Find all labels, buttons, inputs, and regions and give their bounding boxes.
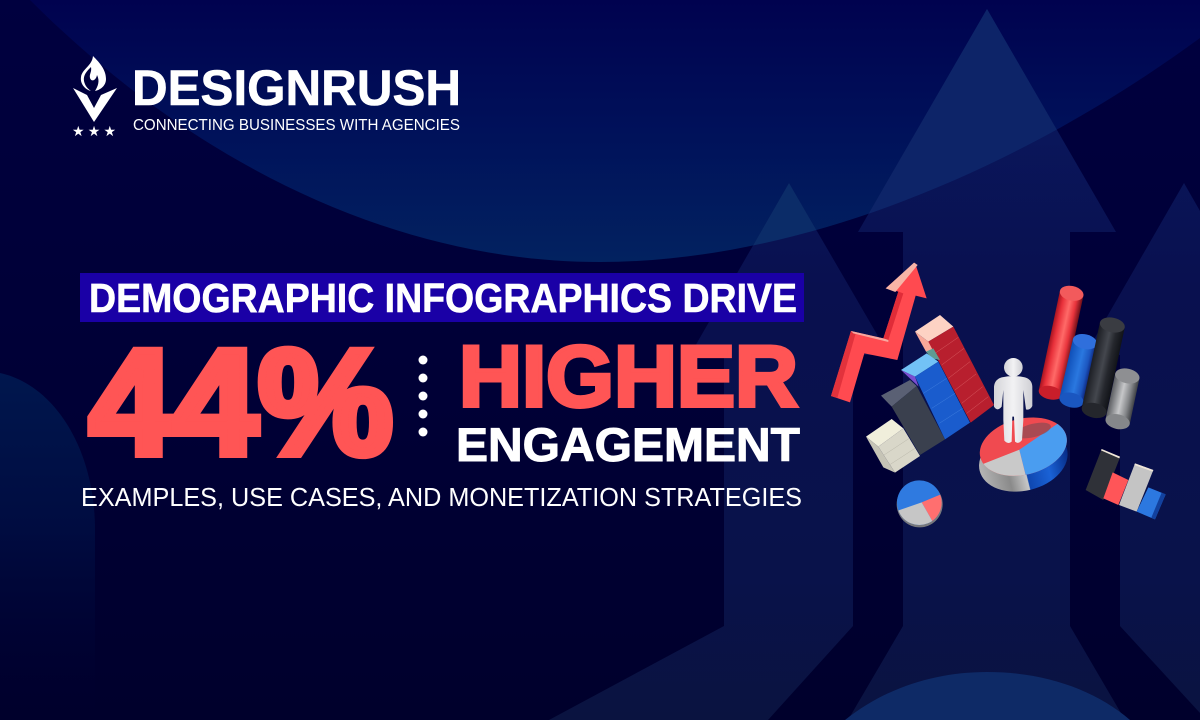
background arrow: right <box>1085 183 1200 713</box>
icon: V shield <box>73 88 117 122</box>
brand name: DESIGNRUSH <box>132 60 461 116</box>
heading banner: DEMOGRAPHIC INFOGRAPHICS DRIVE <box>89 275 797 321</box>
big statistic 44%: 44% <box>89 318 393 486</box>
background arrow: left <box>549 183 889 720</box>
icon: flame <box>81 56 106 91</box>
3D chart cluster <box>831 263 1166 528</box>
icon: red zigzag arrow <box>831 263 927 402</box>
arrow head highlights inside the arc <box>753 10 1056 246</box>
icon: small pie chart <box>896 480 943 528</box>
ENGAGEMENT: ENGAGEMENT <box>456 418 800 471</box>
subtitle: EXAMPLES, USE CASES, AND MONETIZATION STRATEGIES <box>81 484 802 512</box>
bottom ellipse glow <box>845 672 1130 720</box>
icon: cylinder bar chart <box>1037 284 1141 431</box>
icon: stars: ★ ★ ★ <box>72 123 116 139</box>
icon: 3D pie chart <box>979 418 1068 492</box>
icon: human figure <box>994 358 1032 443</box>
tagline: CONNECTING BUSINESSES WITH AGENCIES <box>133 117 460 134</box>
background arrow: centre <box>848 9 1125 720</box>
icon: small 3D bar chart <box>1086 449 1166 519</box>
logo <box>72 56 461 139</box>
HIGHER: HIGHER <box>459 329 798 425</box>
icon: stepped bar block chart <box>866 315 994 473</box>
background arc at top <box>30 0 1200 262</box>
background blob at left <box>0 373 95 720</box>
dotted divider <box>418 356 428 436</box>
